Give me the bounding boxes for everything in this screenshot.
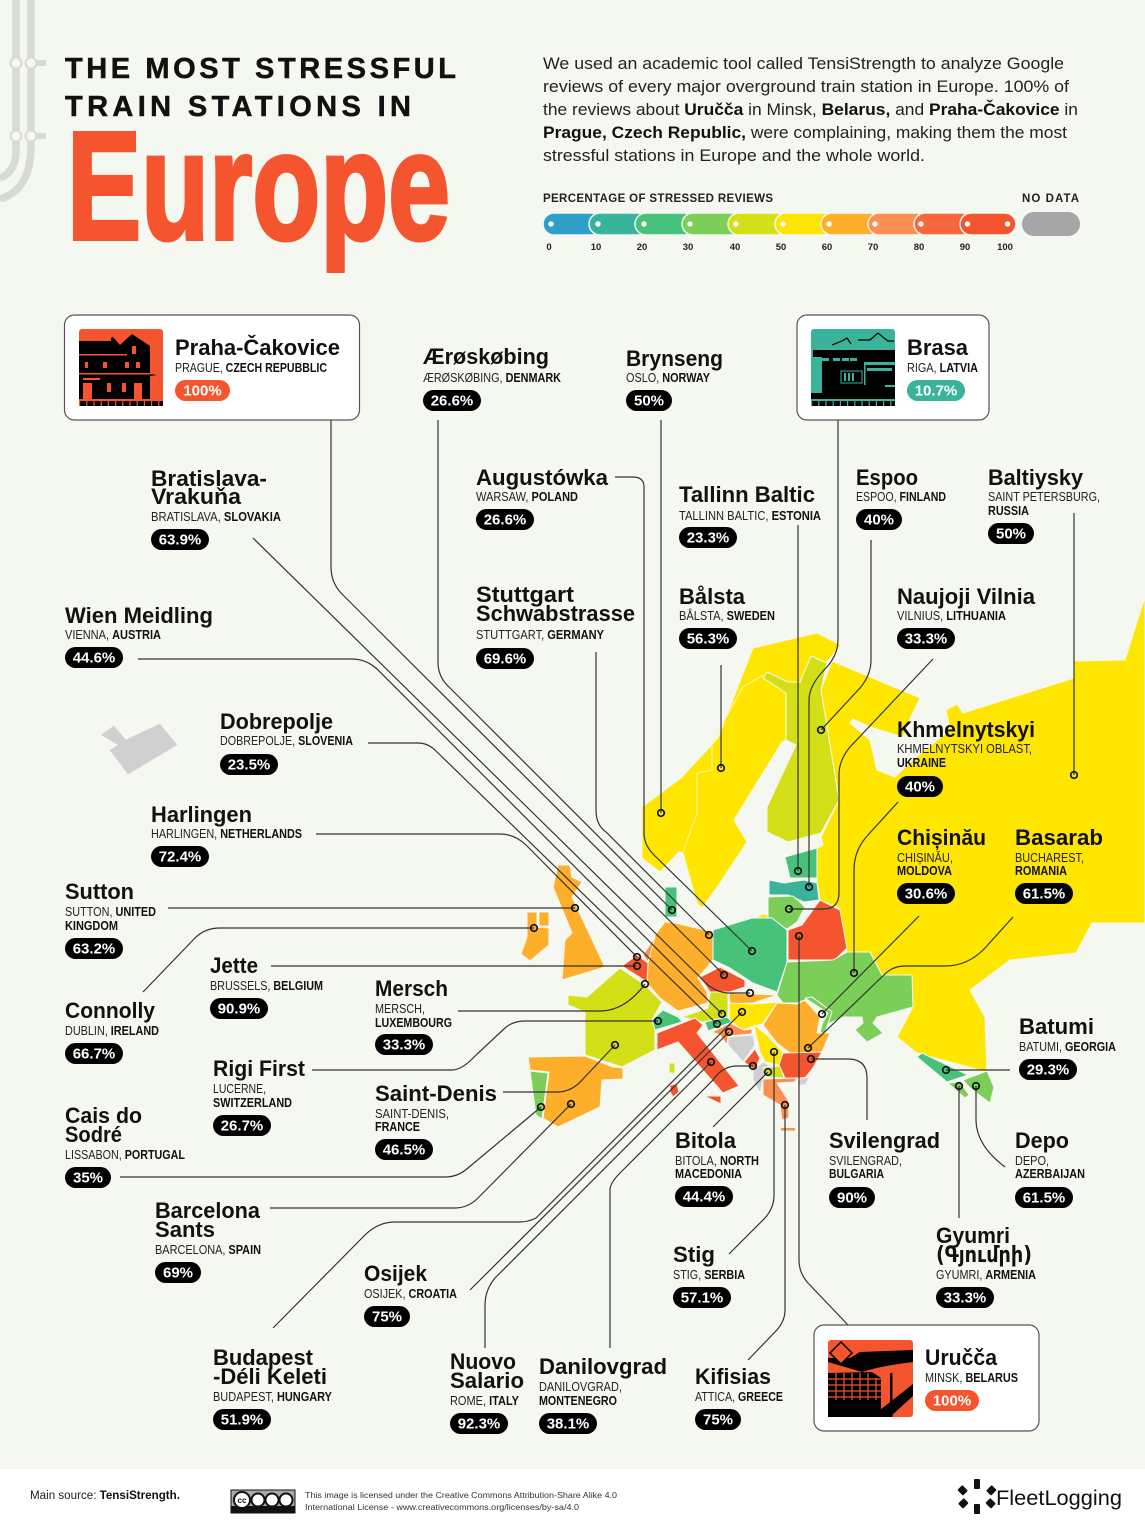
label: Gyumri: (Գյումրի) bbox=[936, 1243, 1032, 1268]
country: Estonia bbox=[785, 848, 817, 878]
label: Stuttgart Schwabstrasse: STUTTGART, GERMANY bbox=[476, 627, 604, 642]
label: Harlingen: HARLINGEN, NETHERLANDS bbox=[151, 826, 302, 841]
label: Connolly: Connolly bbox=[65, 998, 156, 1023]
label: Bitola bbox=[675, 1128, 759, 1207]
legend: 40 bbox=[730, 242, 740, 253]
label: Jette: 90.9% bbox=[218, 1000, 260, 1018]
licence text: This image is licensed under the Creative Commons Attribution-Share Alike 4.0 bbox=[305, 1490, 617, 1500]
label: Khmelnytskyi bbox=[897, 717, 1035, 797]
legend: 10 bbox=[591, 242, 601, 253]
country: Kaliningrad bbox=[755, 914, 772, 921]
leader: Gyumri bbox=[956, 1083, 962, 1218]
country: Spain bbox=[528, 1056, 623, 1127]
legend: 90 bbox=[960, 242, 970, 253]
label: Wien Meidling bbox=[65, 603, 213, 668]
leader: Sutton bbox=[168, 905, 578, 911]
intro text: Prague, Czech Republic, were complaining, making them the most bbox=[543, 123, 1067, 142]
label: Harlingen bbox=[151, 802, 302, 867]
label: Depo bbox=[1015, 1128, 1085, 1208]
label: Cais do Sodré: LISSABON, PORTUGAL bbox=[65, 1147, 185, 1162]
label: Stuttgart Schwabstrasse: Stuttgart bbox=[476, 582, 575, 607]
label: Mersch: MERSCH, bbox=[375, 1001, 425, 1016]
label: Sutton: Sutton bbox=[65, 879, 134, 904]
leader: Osijek bbox=[470, 1029, 732, 1290]
label: Brynseng: 50% bbox=[634, 392, 664, 410]
country: Greece bbox=[763, 1078, 797, 1120]
label: Baltiysky: RUSSIA bbox=[988, 503, 1030, 518]
label: Bitola: MACEDONIA bbox=[675, 1166, 743, 1181]
legend: 60 bbox=[822, 242, 832, 253]
footer bbox=[0, 1469, 1145, 1536]
label: Khmelnytskyi: 40% bbox=[905, 778, 935, 796]
card: Praha-Čakovice bbox=[64, 315, 360, 420]
card: Brasa: RIGA, LATVIA bbox=[907, 360, 979, 375]
label: Sutton bbox=[65, 879, 156, 959]
country: Sardinia bbox=[670, 1084, 679, 1097]
country: Switzerland bbox=[652, 1010, 682, 1030]
leader: Jette bbox=[271, 963, 640, 969]
label: Naujoji Vilnia: Naujoji Vilnia bbox=[897, 584, 1036, 609]
country: Montenegro bbox=[744, 1049, 760, 1070]
country: Azerbaijan bbox=[963, 1071, 994, 1103]
country: Latvia bbox=[769, 880, 819, 902]
label: Kifisias: ATTICA, GREECE bbox=[695, 1389, 783, 1404]
label: Chișinău bbox=[897, 825, 986, 904]
card: Brasa: 10.7% bbox=[915, 382, 957, 400]
label: Svilengrad: Svilengrad bbox=[829, 1128, 940, 1153]
country: Northern Ireland bbox=[539, 912, 549, 926]
country: Ukraine bbox=[777, 952, 913, 1042]
label: Wien Meidling: VIENNA, AUSTRIA bbox=[65, 627, 162, 642]
title bbox=[65, 53, 456, 272]
leader: Rigi First bbox=[312, 1018, 661, 1070]
label: Barcelona Sants: Barcelona bbox=[155, 1198, 261, 1223]
country: Austria bbox=[682, 992, 728, 1022]
leader: Wien Meidling bbox=[138, 659, 725, 1017]
label: Stig bbox=[673, 1242, 746, 1308]
leader lines and station pins bbox=[120, 420, 1077, 1360]
leader: Espoo bbox=[818, 540, 871, 733]
label: Batumi: BATUMI, GEORGIA bbox=[1019, 1039, 1116, 1054]
country: Albania bbox=[753, 1062, 768, 1093]
label: Connolly: DUBLIN, IRELAND bbox=[65, 1023, 159, 1038]
label: Svilengrad bbox=[829, 1128, 940, 1208]
label: Naujoji Vilnia: VILNIUS, LITHUANIA bbox=[897, 608, 1007, 623]
country: France bbox=[568, 968, 662, 1067]
label: Chișinău: CHIȘINĂU, bbox=[897, 850, 953, 865]
label: Depo: Depo bbox=[1015, 1128, 1069, 1153]
label: Osijek: 75% bbox=[372, 1308, 402, 1326]
country: Italy bbox=[657, 1018, 739, 1093]
country: Crete bbox=[781, 1128, 795, 1130]
label: Chișinău: 30.6% bbox=[905, 886, 947, 902]
label: Bitola: 44.4% bbox=[683, 1188, 725, 1206]
label: Svilengrad: 90% bbox=[837, 1190, 867, 1206]
label: Connolly bbox=[65, 998, 159, 1064]
label: Stig: Stig bbox=[673, 1242, 715, 1267]
label: Batumi: 29.3% bbox=[1027, 1062, 1069, 1078]
card: Uručča: Uručča bbox=[925, 1345, 998, 1370]
label: Bratislava-Vrakuňa bbox=[151, 466, 282, 550]
country: Portugal bbox=[530, 1071, 548, 1119]
label: Naujoji Vilnia bbox=[897, 584, 1036, 649]
leader: Batumi bbox=[943, 1067, 1010, 1073]
label: Stuttgart Schwabstrasse bbox=[476, 582, 635, 669]
card: Praha-Čakovice: 100% bbox=[183, 382, 222, 400]
label: Espoo: ESPOO, FINLAND bbox=[856, 489, 946, 504]
country: Netherlands bbox=[643, 937, 655, 962]
licence badge: cc bbox=[238, 1496, 247, 1505]
label: Barcelona Sants: BARCELONA, SPAIN bbox=[155, 1242, 261, 1257]
country: North Macedonia bbox=[763, 1066, 784, 1078]
FleetLogging logo: FleetLogging bbox=[996, 1487, 1122, 1510]
label: Basarab bbox=[1015, 825, 1103, 904]
label: Cais do Sodré bbox=[65, 1103, 185, 1188]
card: Brasa bbox=[797, 315, 989, 420]
label: Mersch bbox=[375, 976, 452, 1055]
Norway and Sweden border bbox=[683, 675, 763, 852]
FleetLogging logo bbox=[957, 1479, 1122, 1514]
label: Brynseng: OSLO, NORWAY bbox=[626, 370, 710, 385]
label: Danilovgrad: MONTENEGRO bbox=[539, 1393, 617, 1408]
legend: 50 bbox=[776, 242, 786, 253]
label: Saint-Denis: SAINT-DENIS, bbox=[375, 1106, 449, 1121]
label: Svilengrad: BULGARIA bbox=[829, 1166, 884, 1181]
label: Saint-Denis bbox=[375, 1081, 497, 1160]
label: Budapest-Déli Keleti: Budapest bbox=[213, 1345, 314, 1370]
legend: 0 bbox=[546, 242, 552, 253]
leader: Praha-Čakovice bbox=[331, 420, 727, 978]
leader: Brasa bbox=[806, 420, 838, 890]
intro text: reviews of every major overground train station in Europe. 100% of bbox=[543, 77, 1069, 96]
leader: Khmelnytskyi bbox=[851, 802, 898, 976]
leader: Dobrepolje bbox=[368, 743, 720, 1027]
intro text bbox=[543, 54, 1078, 165]
label: Stig: STIG, SERBIA bbox=[673, 1267, 746, 1282]
label: Sutton: KINGDOM bbox=[65, 918, 118, 933]
country: Poland bbox=[713, 918, 787, 992]
label: Dobrepolje: DOBREPOLJE, SLOVENIA bbox=[220, 733, 353, 748]
leader: Stuttgart Schwabstrasse bbox=[596, 652, 712, 938]
label: Jette bbox=[210, 953, 323, 1019]
country: Russia bbox=[817, 597, 1145, 1072]
label: Barcelona Sants: 69% bbox=[163, 1264, 193, 1282]
label: Rigi First: SWITZERLAND bbox=[213, 1095, 292, 1110]
label: Basarab: ROMANIA bbox=[1015, 863, 1068, 878]
country: Bulgaria bbox=[779, 1052, 822, 1078]
leader: Brynseng bbox=[658, 420, 664, 816]
leader: Bratislava-Vrakuňa bbox=[253, 538, 753, 996]
country: Norway and Sweden bbox=[642, 633, 841, 908]
label: Augustówka: 26.6% bbox=[484, 512, 526, 528]
country: Germany bbox=[647, 922, 713, 1011]
leader: Bålsta bbox=[718, 665, 724, 771]
label: Svilengrad: SVILENGRAD, bbox=[829, 1153, 902, 1168]
label: Ærøskøbing: Ærøskøbing bbox=[423, 344, 549, 369]
label: Rigi First: Rigi First bbox=[213, 1056, 306, 1081]
card: Uručča: 100% bbox=[933, 1392, 971, 1410]
label: Tallinn Baltic: Tallinn Baltic bbox=[679, 482, 815, 507]
leader: Nuovo Salario bbox=[485, 1059, 714, 1348]
label: Stuttgart Schwabstrasse: Schwabstrasse bbox=[476, 601, 635, 626]
card: Uručča bbox=[814, 1325, 1039, 1431]
label: Bratislava-Vrakuňa: Vrakuňa bbox=[151, 484, 242, 509]
country: Sicily bbox=[704, 1096, 721, 1104]
legend: NO DATA bbox=[1022, 193, 1079, 205]
label: Chișinău: MOLDOVA bbox=[897, 863, 953, 878]
label: Basarab: BUCHAREST, bbox=[1015, 850, 1084, 865]
label: Tallinn Baltic bbox=[679, 482, 822, 548]
country: Slovenia bbox=[705, 1017, 732, 1031]
label: Ærøskøbing bbox=[423, 344, 562, 411]
label: Depo: AZERBAIJAN bbox=[1015, 1166, 1085, 1181]
label: Jette: BRUSSELS, BELGIUM bbox=[210, 978, 323, 993]
leader: Svilengrad bbox=[808, 1056, 867, 1120]
label: Budapest-Déli Keleti bbox=[213, 1345, 332, 1430]
country: Ireland bbox=[521, 912, 549, 961]
label: Naujoji Vilnia: 33.3% bbox=[905, 630, 947, 648]
country: United Kingdom bbox=[553, 865, 605, 980]
leader: Ærøskøbing bbox=[438, 420, 675, 913]
map of Europe bbox=[100, 597, 1145, 1130]
label: Budapest-Déli Keleti: BUDAPEST, HUNGARY bbox=[213, 1389, 332, 1404]
label: Chișinău: Chișinău bbox=[897, 825, 986, 850]
label: Khmelnytskyi: Khmelnytskyi bbox=[897, 717, 1035, 742]
decorative rail tracks bbox=[0, 0, 46, 199]
label: Basarab: 61.5% bbox=[1023, 886, 1065, 902]
leader: Basarab bbox=[805, 917, 1013, 1051]
label: Augustówka: WARSAW, POLAND bbox=[476, 489, 578, 504]
card: Uručča: MINSK, BELARUS bbox=[925, 1370, 1018, 1385]
label: Ærøskøbing: ÆRØSKØBING, DENMARK bbox=[423, 370, 562, 385]
label: Nuovo Salario: Salario bbox=[450, 1368, 524, 1393]
leader: Saint-Denis bbox=[503, 1042, 618, 1092]
label: Budapest-Déli Keleti: 51.9% bbox=[221, 1412, 263, 1428]
card: Praha-Čakovice: PRAGUE, CZECH REPUBBLIC bbox=[175, 360, 327, 375]
label: Basarab: Basarab bbox=[1015, 825, 1103, 850]
card: Praha-Čakovice: Praha-Čakovice bbox=[175, 335, 340, 360]
country: Turkey bbox=[798, 1077, 810, 1085]
label: Wien Meidling: Wien Meidling bbox=[65, 603, 213, 628]
label: Gyumri: GYUMRI, ARMENIA bbox=[936, 1267, 1037, 1282]
label: Ærøskøbing: 26.6% bbox=[431, 392, 473, 410]
label: Bitola: Bitola bbox=[675, 1128, 737, 1153]
label: Dobrepolje bbox=[220, 709, 353, 775]
legend: PERCENTAGE OF STRESSED REVIEWS bbox=[543, 193, 773, 205]
label: Augustówka bbox=[476, 465, 609, 530]
label: Bålsta: BÅLSTA, SWEDEN bbox=[679, 608, 775, 623]
leader: Kifisias bbox=[748, 1102, 788, 1360]
licence text: International License - www.creativecommons.org/licenses/by-sa/4.0 bbox=[305, 1502, 579, 1512]
label: Osijek: Osijek bbox=[364, 1261, 428, 1286]
label: Gyumri bbox=[936, 1223, 1037, 1308]
icon: Brasa station building bbox=[811, 329, 895, 406]
title: THE MOST STRESSFUL bbox=[65, 53, 456, 85]
country: Corsica bbox=[669, 1063, 675, 1073]
country: Serbia bbox=[754, 1025, 783, 1065]
label: Baltiysky: 50% bbox=[996, 526, 1026, 542]
label: Danilovgrad: 38.1% bbox=[547, 1416, 589, 1432]
label: Espoo bbox=[856, 465, 946, 530]
label: Nuovo Salario: ROME, ITALY bbox=[450, 1393, 519, 1408]
label: Stig: 57.1% bbox=[681, 1290, 723, 1306]
leader: Tallinn Baltic bbox=[795, 525, 801, 874]
label: Rigi First bbox=[213, 1056, 306, 1136]
label: Espoo: 40% bbox=[864, 512, 894, 528]
label: Baltiysky: SAINT PETERSBURG, bbox=[988, 489, 1100, 504]
leader: Stig bbox=[729, 1049, 777, 1254]
icon: Praha station building bbox=[79, 329, 163, 406]
leader: Budapest-Déli Keleti bbox=[273, 1009, 745, 1328]
label: Khmelnytskyi: KHMELNYTSKYI OBLAST, bbox=[897, 741, 1032, 756]
label: Cais do Sodré: 35% bbox=[73, 1170, 103, 1186]
country: Bosnia bbox=[728, 1035, 755, 1062]
label: Wien Meidling: 44.6% bbox=[73, 650, 115, 666]
label: Barcelona Sants bbox=[155, 1198, 261, 1283]
leader: Uručča bbox=[796, 933, 848, 1325]
label: Danilovgrad: Danilovgrad bbox=[539, 1354, 667, 1379]
label: Mersch: LUXEMBOURG bbox=[375, 1015, 452, 1030]
leader: Harlingen bbox=[316, 834, 640, 960]
country: Finland bbox=[763, 656, 839, 842]
label: Bratislava-Vrakuňa: Bratislava- bbox=[151, 466, 267, 491]
label: Batumi bbox=[1019, 1014, 1116, 1080]
label: Cais do Sodré: Sodré bbox=[65, 1122, 122, 1147]
label: Danilovgrad bbox=[539, 1354, 667, 1434]
leader: Augustówka bbox=[615, 477, 755, 954]
country: Denmark bbox=[665, 887, 677, 917]
country: Lithuania bbox=[768, 896, 805, 929]
label: Dobrepolje: Dobrepolje bbox=[220, 709, 333, 734]
leader: Connolly bbox=[143, 925, 537, 992]
country: Czech Republic bbox=[700, 967, 745, 992]
label: Harlingen: Harlingen bbox=[151, 802, 252, 827]
intro text: the reviews about Uručča in Minsk, Belarus, and Praha-Čakovice in bbox=[543, 100, 1078, 119]
leader: Chișinău bbox=[819, 916, 919, 1017]
country: Armenia bbox=[948, 1082, 969, 1098]
leader: Danilovgrad bbox=[610, 1063, 756, 1348]
country: Iceland bbox=[100, 723, 178, 775]
licence badge bbox=[231, 1490, 295, 1513]
legend: 70 bbox=[868, 242, 878, 253]
label: Rigi First: LUCERNE, bbox=[213, 1081, 266, 1096]
label: Saint-Denis: 46.5% bbox=[383, 1142, 425, 1158]
country: Slovakia bbox=[729, 993, 777, 1004]
legend: 100 bbox=[997, 242, 1013, 253]
label: Stuttgart Schwabstrasse: 69.6% bbox=[484, 650, 526, 668]
label: Sutton: SUTTON, UNITED bbox=[65, 904, 156, 919]
label: Espoo: Espoo bbox=[856, 465, 918, 490]
label: Jette: Jette bbox=[210, 953, 258, 978]
label: Bålsta: Bålsta bbox=[679, 584, 746, 609]
legend: 80 bbox=[914, 242, 924, 253]
intro text: We used an academic tool called TensiStrength to analyze Google bbox=[543, 54, 1064, 73]
label: Nuovo Salario bbox=[450, 1349, 524, 1434]
label: Budapest-Déli Keleti: -Déli Keleti bbox=[213, 1364, 327, 1389]
label: Khmelnytskyi: UKRAINE bbox=[897, 755, 946, 770]
label: Bratislava-Vrakuňa: 63.9% bbox=[159, 532, 201, 548]
licence text bbox=[305, 1490, 617, 1512]
label: Connolly: 66.7% bbox=[73, 1046, 115, 1062]
label: Kifisias: Kifisias bbox=[695, 1364, 771, 1389]
label: Gyumri: Gyumri bbox=[936, 1223, 1010, 1248]
label: Sutton: 63.2% bbox=[73, 940, 115, 958]
label: Brynseng: Brynseng bbox=[626, 346, 723, 371]
label: Brynseng bbox=[626, 346, 723, 411]
label: Mersch: 33.3% bbox=[383, 1036, 425, 1054]
label: Osijek bbox=[364, 1261, 457, 1327]
label: Augustówka: Augustówka bbox=[476, 465, 609, 490]
label: Barcelona Sants: Sants bbox=[155, 1217, 215, 1242]
label: Tallinn Baltic: 23.3% bbox=[687, 530, 729, 546]
country: Croatia bbox=[712, 1023, 752, 1045]
label: Saint-Denis: FRANCE bbox=[375, 1119, 420, 1134]
title: TRAIN STATIONS IN bbox=[65, 91, 411, 123]
card: Brasa: Brasa bbox=[907, 335, 969, 360]
leader: Bitola bbox=[713, 1069, 771, 1127]
country: Georgia bbox=[917, 1053, 968, 1082]
label: Danilovgrad: DANILOVGRAD, bbox=[539, 1379, 622, 1394]
leader: Depo bbox=[973, 1083, 1005, 1167]
label: Kifisias: 75% bbox=[703, 1412, 733, 1428]
label: Kifisias bbox=[695, 1364, 783, 1430]
label: Depo: DEPO, bbox=[1015, 1153, 1049, 1168]
country: Belarus bbox=[788, 900, 847, 960]
label: Gyumri: 33.3% bbox=[944, 1290, 986, 1306]
label: Baltiysky bbox=[988, 465, 1100, 544]
label: Harlingen: 72.4% bbox=[159, 848, 201, 866]
country: Romania bbox=[763, 1000, 830, 1053]
legend: 30 bbox=[683, 242, 693, 253]
country: Hungary bbox=[729, 1002, 778, 1030]
country: Belgium bbox=[622, 955, 648, 982]
legend bbox=[543, 193, 1080, 253]
label: Depo: 61.5% bbox=[1023, 1190, 1065, 1206]
label: Tallinn Baltic: TALLINN BALTIC, ESTONIA bbox=[679, 508, 822, 523]
label: Cais do Sodré: Cais do bbox=[65, 1103, 142, 1128]
leader: Baltiysky bbox=[1071, 513, 1077, 778]
leader: Mersch bbox=[458, 981, 648, 1011]
label: Batumi: Batumi bbox=[1019, 1014, 1094, 1039]
icon: Uručča station building bbox=[828, 1340, 913, 1417]
title: Europe bbox=[67, 100, 450, 272]
label: Saint-Denis: Saint-Denis bbox=[375, 1081, 497, 1106]
label: Mersch: Mersch bbox=[375, 976, 448, 1001]
label: Dobrepolje: 23.5% bbox=[228, 756, 270, 774]
label: Osijek: OSIJEK, CROATIA bbox=[364, 1286, 457, 1301]
label: Rigi First: 26.7% bbox=[221, 1118, 263, 1134]
label: Bitola: BITOLA, NORTH bbox=[675, 1153, 759, 1168]
label: Bratislava-Vrakuňa: BRATISLAVA, SLOVAKIA bbox=[151, 509, 282, 524]
source text: Main source: TensiStrength. bbox=[30, 1490, 180, 1502]
intro text: stressful stations in Europe and the whole world. bbox=[543, 146, 925, 165]
leader: Naujoji Vilnia bbox=[786, 659, 933, 912]
leader: Cais do Sodré bbox=[120, 1104, 544, 1177]
label: Baltiysky: Baltiysky bbox=[988, 465, 1084, 490]
country: Moldova bbox=[805, 997, 832, 1033]
label: Bålsta bbox=[679, 584, 775, 649]
legend: 20 bbox=[637, 242, 647, 253]
label: Nuovo Salario: 92.3% bbox=[458, 1416, 500, 1432]
label: Nuovo Salario: Nuovo bbox=[450, 1349, 516, 1374]
leader: Barcelona Sants bbox=[270, 1101, 574, 1208]
label: Bålsta: 56.3% bbox=[687, 630, 729, 648]
